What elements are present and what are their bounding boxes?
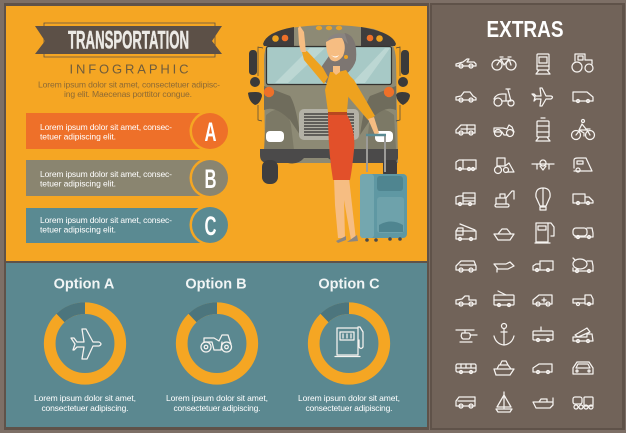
- icon: motorbike: [494, 125, 514, 136]
- icon: dump truck: [573, 328, 593, 342]
- option bar C: [26, 204, 230, 246]
- icon: convertible: [456, 59, 476, 68]
- icon: fire engine: [533, 327, 553, 342]
- icon: car front: [573, 362, 593, 374]
- option A: [34, 276, 136, 413]
- legs: [334, 178, 356, 240]
- icon: ambulance: [533, 295, 552, 306]
- icon: heavy truck: [573, 397, 593, 409]
- icon: helicopter: [456, 330, 477, 342]
- icon: semi truck: [573, 194, 593, 204]
- panel: main frame: [4, 3, 429, 430]
- icon: cruise ship: [494, 361, 514, 375]
- option B: [166, 276, 268, 413]
- icon: minivan: [456, 125, 475, 135]
- hair back: [322, 33, 356, 84]
- icon: gas pump: [535, 223, 554, 243]
- icon: truck cab: [456, 160, 476, 170]
- intro text: Lorem ipsum dolor sit amet, consectetuer adipisc-: [38, 80, 220, 90]
- option bar B: [26, 158, 230, 198]
- panel: teal bottom: [6, 263, 427, 427]
- panel: orange top: [6, 6, 427, 261]
- option bar A: Lorem ipsum dolor sit amet, consec-: [40, 122, 172, 132]
- icon: tram: [536, 118, 550, 141]
- icon: delivery van: [533, 364, 552, 374]
- option B: consectetuer adipiscing.: [174, 403, 260, 413]
- option C: Option C: [318, 276, 380, 292]
- intro text: [38, 80, 220, 99]
- subtitle: INFOGRAPHIC: [70, 62, 188, 76]
- skirt: [328, 113, 354, 180]
- option A: Lorem ipsum dolor sit amet,: [34, 393, 136, 403]
- illustration: school bus: [248, 25, 410, 184]
- option bar A: tetuer adipiscing elit.: [40, 132, 116, 142]
- icon: train: [536, 54, 550, 74]
- icon: lorry: [533, 261, 553, 272]
- icon: motorcycle: [201, 335, 232, 352]
- icon grid: [456, 54, 594, 412]
- title: TRANSPORTATION: [68, 26, 189, 54]
- icon: box truck: [456, 193, 475, 206]
- icon: jet: [532, 160, 554, 170]
- option bar B: B: [204, 164, 216, 194]
- icon: trolleybus: [494, 291, 514, 306]
- panel: extras: [430, 3, 625, 430]
- option bar B: tetuer adipiscing elit.: [40, 178, 116, 188]
- icon: coach bus: [456, 364, 476, 374]
- face: [326, 37, 345, 61]
- icon: cyclist: [572, 120, 594, 140]
- arms: [302, 51, 328, 84]
- option C: [298, 276, 400, 413]
- icon: excavator: [495, 191, 514, 207]
- icon: speedboat: [494, 262, 514, 272]
- option C: Lorem ipsum dolor sit amet,: [298, 393, 400, 403]
- icon: camper: [574, 158, 592, 172]
- option C: consectetuer adipiscing.: [306, 403, 392, 413]
- option A: consectetuer adipiscing.: [42, 403, 128, 413]
- torso: [325, 70, 350, 112]
- option bar B: Lorem ipsum dolor sit amet, consec-: [40, 169, 172, 179]
- icon: sailboat: [496, 392, 512, 412]
- option A: Option A: [54, 276, 115, 292]
- icon: scooter: [494, 89, 514, 106]
- icon: fuel pump: [335, 327, 363, 356]
- icon: bus side: [456, 397, 475, 408]
- title ribbon: [35, 23, 222, 57]
- icon: anchor: [494, 324, 514, 345]
- icon: airplane small: [532, 88, 552, 106]
- icon: yacht: [494, 229, 514, 240]
- icon: van: [573, 92, 593, 102]
- icon: flatbed truck: [573, 295, 593, 306]
- icon: hot-air balloon: [536, 188, 550, 210]
- icon: minibus: [456, 261, 476, 272]
- extras heading: EXTRAS: [486, 16, 564, 42]
- icon: airplane: [71, 329, 101, 359]
- option bar C: tetuer adipiscing elit.: [40, 224, 116, 234]
- icon: fire truck: [456, 224, 476, 240]
- icon: bicycle: [492, 57, 516, 70]
- option bar C: Lorem ipsum dolor sit amet, consec-: [40, 215, 172, 225]
- option B: Option B: [185, 276, 247, 292]
- icon: cement mixer: [573, 258, 593, 272]
- intro text: ing elit. Maecenas porttitor congue.: [64, 89, 192, 99]
- illustration: woman with suitcase: [298, 26, 407, 243]
- icon: bulldozer: [494, 158, 514, 174]
- icon: sedan: [456, 92, 476, 102]
- option B: Lorem ipsum dolor sit amet,: [166, 393, 268, 403]
- icon: pickup: [456, 296, 476, 306]
- option bar A: [26, 110, 230, 152]
- suitcase: [367, 136, 385, 172]
- icon: ship: [533, 398, 553, 408]
- icon: tanker truck: [573, 228, 593, 238]
- icon: tractor: [572, 54, 593, 72]
- option bar C: C: [204, 211, 216, 241]
- option bar A: A: [204, 117, 216, 147]
